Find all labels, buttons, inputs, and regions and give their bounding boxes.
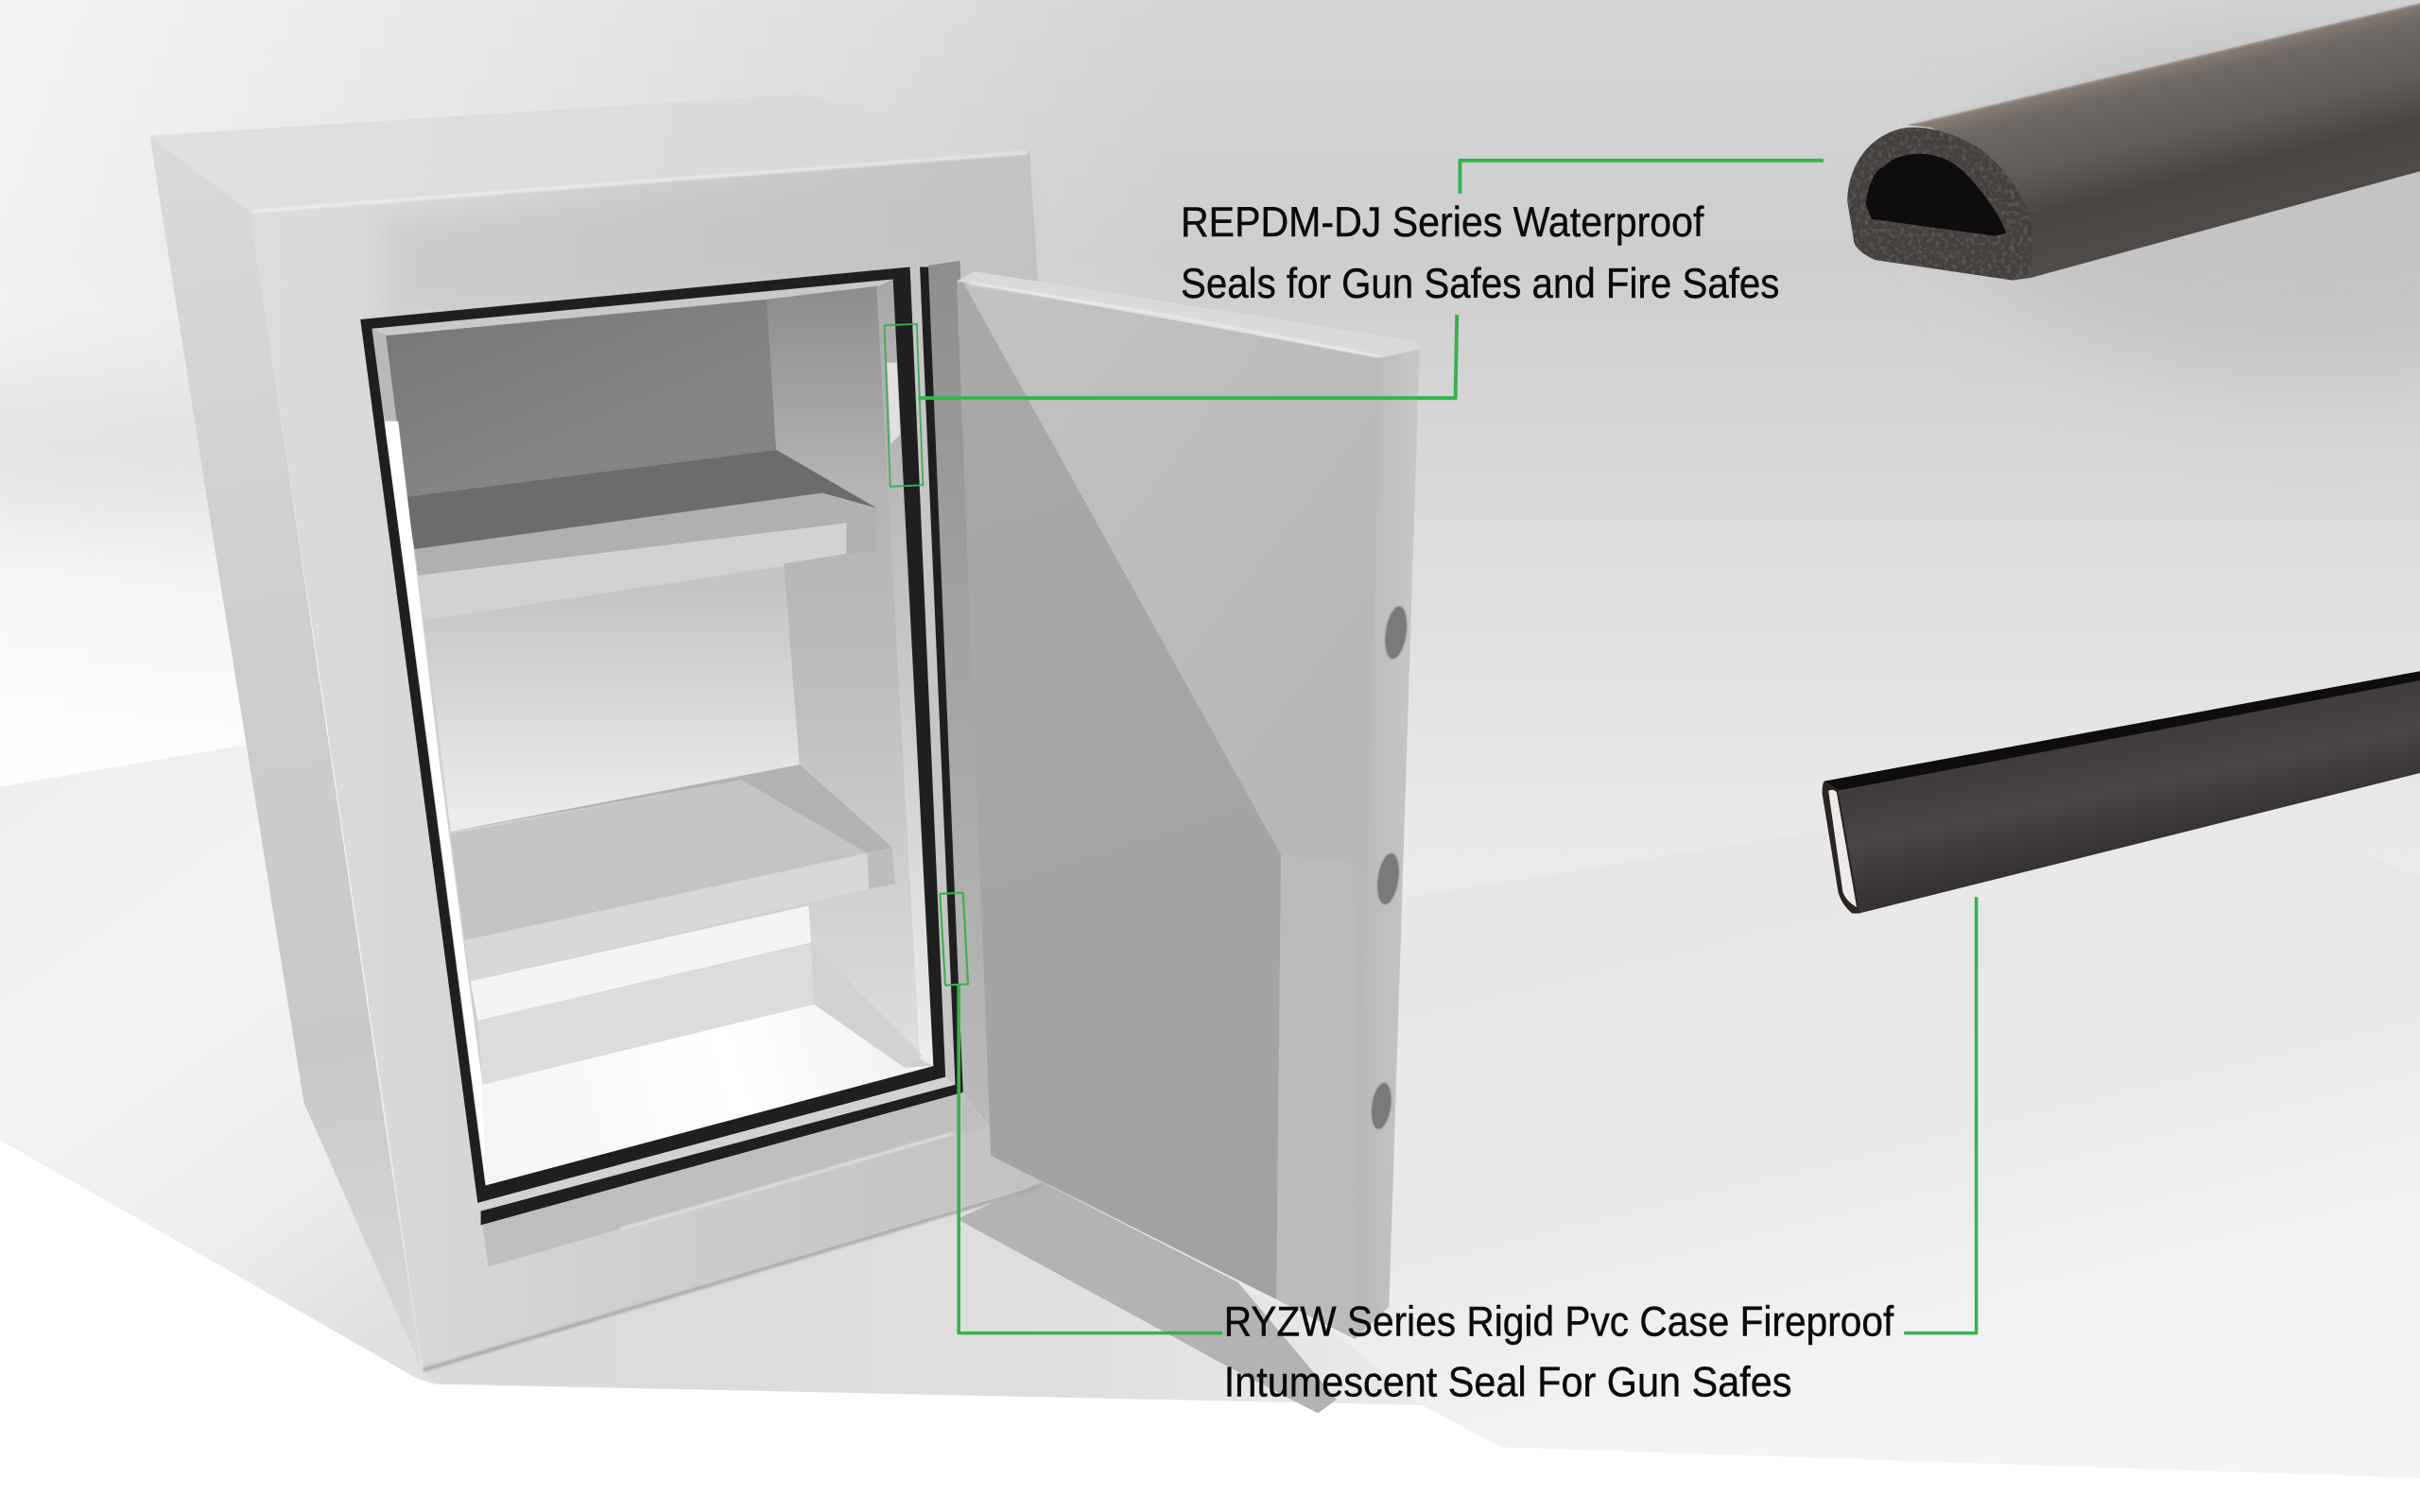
label: fireproof seal: RYZW Series Rigid Pvc Case Fireproof [1224,1297,1894,1345]
safe door [957,271,1420,1339]
lower step [477,943,814,1085]
safe front frame [250,151,1040,1367]
sill [482,1092,988,1266]
strip between seals [910,266,957,1086]
right wall [767,285,926,1065]
safe left side face [149,136,421,1367]
floor shadow of safe [423,1183,1422,1405]
shelf 1 [406,450,876,621]
right lining [876,280,933,1066]
strip end white core [1828,790,1857,907]
lock bolt 3 [1368,1081,1394,1131]
outer black seal strip [481,266,963,1225]
door face lit region [957,281,1381,1339]
strip top band [1824,671,2420,791]
seal top highlight [1913,3,2420,124]
upper back wall [386,300,776,497]
slanted lower wall [811,943,923,1068]
floor shadow of door [957,1156,1337,1414]
shelf 2 [451,765,895,981]
lock bolt 2 [1374,851,1403,906]
seal body [1908,3,2420,281]
label: fireproof seal: Intumescent Seal For Gun Safes [1224,1358,1792,1406]
product: intumescent fireproof strip [1823,671,2420,914]
door top bevel [957,271,1420,358]
white foreground floor [0,1140,2420,1512]
lock bolt 1 [1381,605,1410,661]
contact shadow under safe [423,1187,1040,1370]
interior base [372,280,933,1186]
interior of safe [372,280,933,1186]
strip face [1839,680,2420,914]
callout lines: waterproof seal [885,161,1824,487]
lintel soft shading [386,166,1031,321]
strip end dark rim [1823,782,1859,914]
light patch on right lining [887,362,900,443]
label: waterproof seals: REPDM-DJ Series Waterproof [1181,198,1704,246]
top lining [372,280,893,335]
white left strip [385,421,486,1186]
seal end face [1847,128,2032,281]
door lower right lit region [1276,854,1358,1339]
middle back wall [424,566,800,832]
safe body [149,94,1040,1370]
top edge highlight [253,153,1028,212]
right jamb of frame [928,261,995,1157]
seal hollow [1866,154,2006,236]
label: waterproof seals: Seals for Gun Safes and Fire Safes [1181,259,1779,307]
inner floor [482,1005,932,1186]
callout lines: fireproof seal [940,893,1977,1333]
left lining [372,329,397,421]
lower back wall [471,905,811,1021]
product: D-shaped waterproof seal [1847,3,2420,281]
inner black seal ring [360,266,945,1203]
door right edge [1355,349,1420,1339]
safe top face [149,94,1029,212]
door face shaded region [957,283,1281,1299]
